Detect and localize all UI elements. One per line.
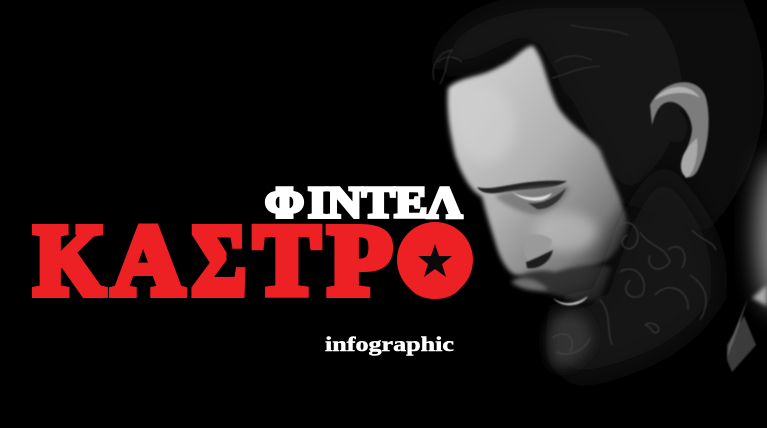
lip — [553, 296, 588, 305]
letter: Omicron: Ο — [401, 204, 469, 316]
eye socket shadow — [495, 186, 570, 214]
letters: INTEL: ΙΝΤΕΛ — [308, 178, 463, 227]
letter: Tau: Τ — [254, 204, 320, 316]
title: surname — [34, 204, 473, 316]
collar — [727, 298, 756, 372]
neck — [756, 154, 767, 310]
hair strands — [433, 25, 628, 84]
nose — [524, 234, 553, 268]
O disc — [397, 222, 473, 298]
beard curls — [552, 223, 716, 354]
letter: Sigma: Σ — [192, 204, 246, 316]
neck highlight — [752, 285, 767, 306]
eyebrow — [477, 181, 567, 193]
face — [447, 46, 628, 282]
chin tuft — [548, 312, 592, 367]
cheek highlight — [533, 212, 597, 252]
forehead highlight — [455, 87, 515, 163]
beard mass — [554, 170, 719, 379]
ear — [650, 82, 709, 178]
eye — [512, 188, 566, 209]
title: first name — [265, 178, 463, 227]
photo: portrait of Fidel Castro — [432, 0, 767, 379]
letter: Rho: Ρ — [328, 204, 392, 316]
hair — [432, 0, 767, 240]
letter: Kappa: Κ — [34, 204, 105, 316]
letter: Phi: Φ — [265, 178, 304, 227]
moustache — [510, 265, 612, 302]
icon: black star — [418, 244, 452, 277]
letter: Alpha: Α — [112, 204, 184, 316]
infographic label: infographic — [325, 332, 454, 356]
